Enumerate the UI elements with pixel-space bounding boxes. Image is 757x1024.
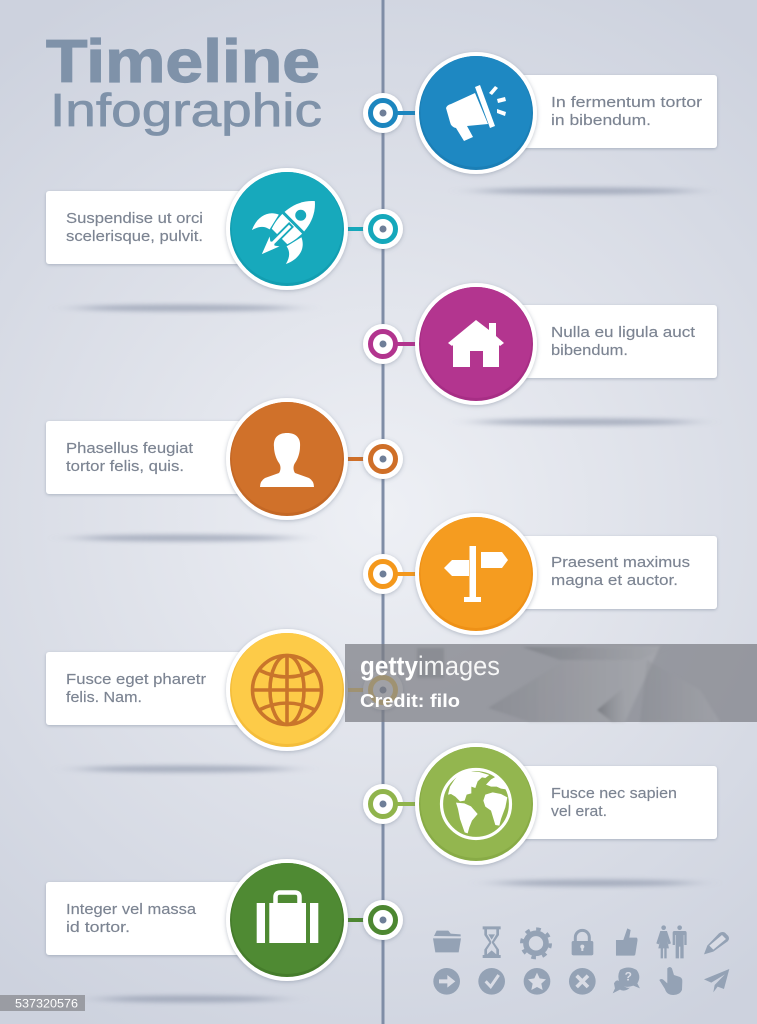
step 6: global network — [46, 629, 403, 751]
badge — [226, 859, 348, 981]
icon: star circle — [524, 968, 550, 995]
icon: paper plane — [704, 969, 729, 992]
icon: person — [260, 433, 314, 487]
card — [46, 652, 256, 725]
card — [46, 191, 256, 264]
watermark logo: images — [418, 651, 500, 681]
card: Phasellus feugiat — [66, 440, 194, 457]
badge — [226, 398, 348, 520]
badge — [415, 513, 537, 635]
badge — [415, 283, 537, 405]
icon: people — [656, 925, 687, 958]
card: Praesent maximus — [551, 554, 690, 571]
step 8: business — [46, 859, 403, 981]
card: bibendum. — [551, 342, 628, 359]
icon: check circle — [478, 968, 505, 995]
badge — [415, 743, 537, 865]
small icon set — [433, 925, 729, 995]
image id tag — [0, 995, 85, 1011]
badge — [415, 52, 537, 174]
icon: rocket — [243, 182, 334, 273]
icon: gear — [522, 929, 550, 958]
card: magna et auctor. — [551, 572, 678, 589]
badge — [226, 168, 348, 290]
watermark logo: getty — [360, 651, 418, 681]
floor shadows — [77, 188, 693, 1002]
card — [46, 421, 256, 494]
card: Suspendise ut orci — [66, 210, 203, 227]
image id tag: 537320576 — [15, 998, 78, 1010]
card: Integer vel massa — [66, 901, 197, 918]
icon: pencil — [704, 932, 729, 954]
icon: padlock — [572, 930, 593, 955]
step 7: earth — [363, 743, 717, 865]
card: Fusce eget pharetr — [66, 671, 206, 688]
watermark band — [345, 644, 757, 722]
icon: pointing hand — [659, 967, 682, 995]
title: Timeline: Timeline — [46, 28, 320, 95]
timeline node — [363, 554, 418, 594]
watermark credit: Credit: filo — [360, 691, 460, 711]
card: tortor felis, quis. — [66, 458, 184, 475]
timeline node — [363, 784, 418, 824]
card: Nulla eu ligula auct — [551, 324, 696, 341]
timeline node — [345, 439, 403, 479]
timeline node — [345, 670, 403, 710]
timeline node — [363, 93, 418, 133]
card — [500, 536, 717, 609]
card: scelerisque, pulvit. — [66, 228, 203, 245]
card: Fusce nec sapien — [551, 785, 677, 802]
subtitle: Infographic: Infographic — [50, 84, 322, 136]
step 3: home — [363, 283, 717, 405]
step 5: signpost — [363, 513, 717, 635]
card: id tortor. — [66, 919, 130, 936]
timeline axis — [382, 0, 384, 1024]
step 4: person — [46, 398, 403, 520]
card — [500, 766, 717, 839]
card — [46, 882, 256, 955]
icon: wire globe — [252, 656, 322, 724]
icon: cross circle — [569, 968, 596, 995]
icon: megaphone — [446, 85, 506, 141]
step 1: announcement — [363, 52, 717, 174]
icon: hourglass — [483, 926, 501, 958]
card: felis. Nam. — [66, 689, 142, 706]
icon: suitcase — [257, 892, 318, 943]
icon: arrow circle — [433, 968, 460, 995]
step 2: launch — [46, 168, 403, 290]
card — [500, 305, 717, 378]
badge — [226, 629, 348, 751]
icon: folder — [433, 931, 461, 952]
timeline node — [345, 209, 403, 249]
icon: question bubbles — [613, 967, 640, 993]
icon: question bubbles: ? — [625, 969, 632, 983]
title — [46, 28, 322, 136]
icon: thumbs up — [616, 928, 638, 956]
card: vel erat. — [551, 803, 607, 820]
timeline node — [345, 900, 403, 940]
icon: house — [448, 320, 504, 367]
icon: earth — [442, 770, 510, 838]
timeline node — [363, 324, 418, 364]
card: in bibendum. — [551, 112, 651, 129]
card: In fermentum tortor — [551, 94, 702, 111]
icon: signpost — [444, 546, 508, 602]
watermark logo — [360, 651, 500, 681]
card — [500, 75, 717, 148]
